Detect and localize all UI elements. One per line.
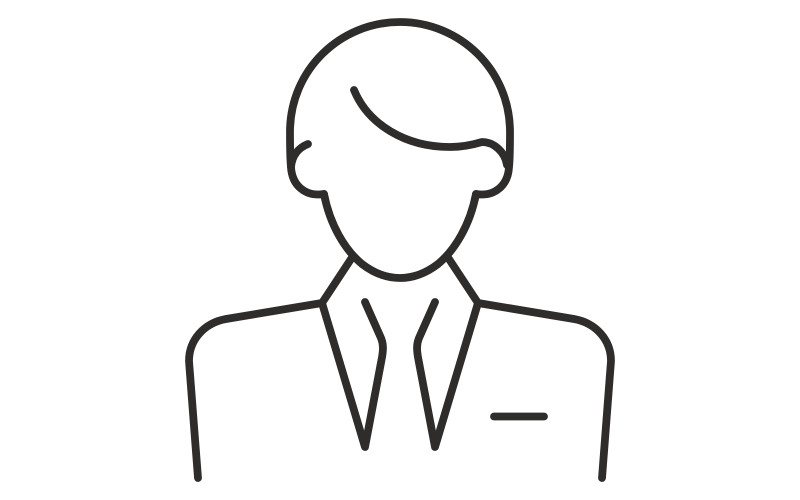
head outline with hair and ears xyxy=(290,22,510,194)
breast pocket xyxy=(494,413,544,420)
right shoulder and arm xyxy=(478,303,611,478)
face and chin xyxy=(324,194,476,278)
left shoulder and arm xyxy=(189,303,322,478)
collar xyxy=(322,256,478,447)
hair fringe xyxy=(354,90,507,165)
